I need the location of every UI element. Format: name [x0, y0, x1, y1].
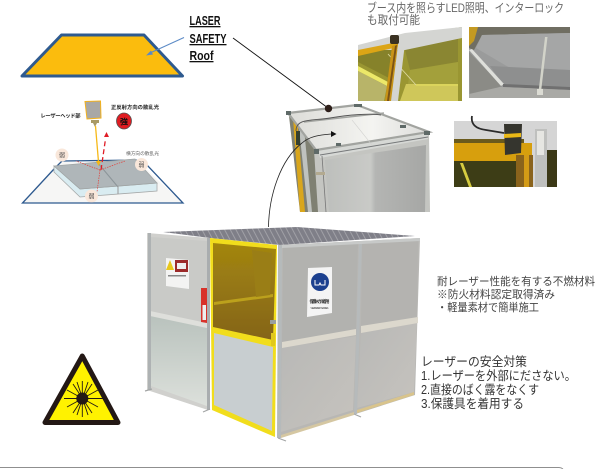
diagram captions: 正反射方向の散乱光	[111, 103, 160, 111]
photo: booth top with roof	[286, 104, 430, 212]
weak indicators: 弱	[88, 194, 95, 200]
interlock on booth top	[296, 131, 300, 145]
left wall	[147, 233, 210, 410]
text: laser safety measures: 1.レーザーを外部にださない。	[421, 369, 576, 383]
caption: LED lighting and interlock: ブース内を照らすLED照明、インターロック	[367, 0, 564, 15]
curved leader from booth to top	[268, 131, 336, 227]
diagram captions: 横方向の散乱光	[126, 150, 159, 157]
photo: interlock device	[454, 116, 557, 187]
diagram captions	[40, 103, 160, 157]
photo: ceiling LED	[469, 27, 570, 98]
reflected red dashed arrow	[101, 132, 109, 170]
photo: yellow interior lighting	[358, 27, 462, 101]
caption: LED lighting and interlock: も取付可能	[367, 13, 420, 27]
safety glasses sign: 保護メガネ着用	[310, 298, 330, 305]
text: material features: ・軽量素材で簡単施工	[437, 300, 539, 314]
strong indicator	[116, 113, 132, 129]
caption: LED lighting and interlock	[367, 0, 564, 27]
text: laser safety measures: 3.保護具を着用する	[421, 396, 524, 411]
icon: laser warning triangle	[45, 356, 118, 422]
safety glasses sign	[307, 267, 332, 317]
text: laser safety measures: レーザーの安全対策	[421, 354, 527, 369]
booth top cable	[296, 114, 381, 131]
main booth photo	[145, 227, 420, 441]
roof marker dot	[325, 105, 332, 112]
leader line: label to booth roof	[233, 38, 328, 108]
booth roof	[163, 227, 415, 245]
door handle	[270, 320, 276, 346]
strong indicator: 強	[120, 116, 128, 126]
weak indicators	[56, 148, 148, 202]
heading: laser safety roof: Roof	[190, 48, 214, 63]
arrow: roof label to trapezoid	[146, 38, 184, 56]
safety glasses sign: WEAR SAFETY GLASSES	[310, 306, 329, 310]
text: laser safety measures	[421, 354, 576, 411]
bottom rule	[0, 468, 563, 469]
text: material features: 耐レーザー性能を有する不燃材料	[437, 274, 595, 288]
text: material features: ※防火材料認定取得済み	[437, 287, 555, 301]
metal plates	[54, 159, 157, 197]
text: laser safety measures: 2.直接のばく露をなくす	[421, 382, 539, 397]
booth top joints	[286, 104, 430, 154]
heading: laser safety roof	[190, 13, 227, 63]
diagram: laser scattering on a workpiece	[22, 101, 183, 203]
heading: laser safety roof: LASER	[190, 13, 221, 28]
warning label	[166, 258, 189, 289]
laser head	[85, 101, 101, 127]
booth feet	[145, 389, 361, 441]
heading: laser safety roof: SAFETY	[190, 31, 227, 46]
roof diagram: yellow trapezoid	[22, 35, 182, 76]
laser beam	[96, 126, 101, 166]
weak indicators: 弱	[59, 152, 65, 160]
right wall	[277, 238, 420, 438]
booth top wall	[289, 116, 430, 212]
red label	[201, 288, 207, 323]
booth top roof	[288, 105, 429, 150]
text: material features	[437, 274, 595, 314]
yellow door	[210, 238, 277, 437]
diagram captions: レーザーヘッド部	[40, 112, 81, 120]
weak indicators: 弱	[138, 162, 145, 169]
floor plane	[22, 160, 183, 203]
scattered red dotted rays	[76, 161, 125, 192]
